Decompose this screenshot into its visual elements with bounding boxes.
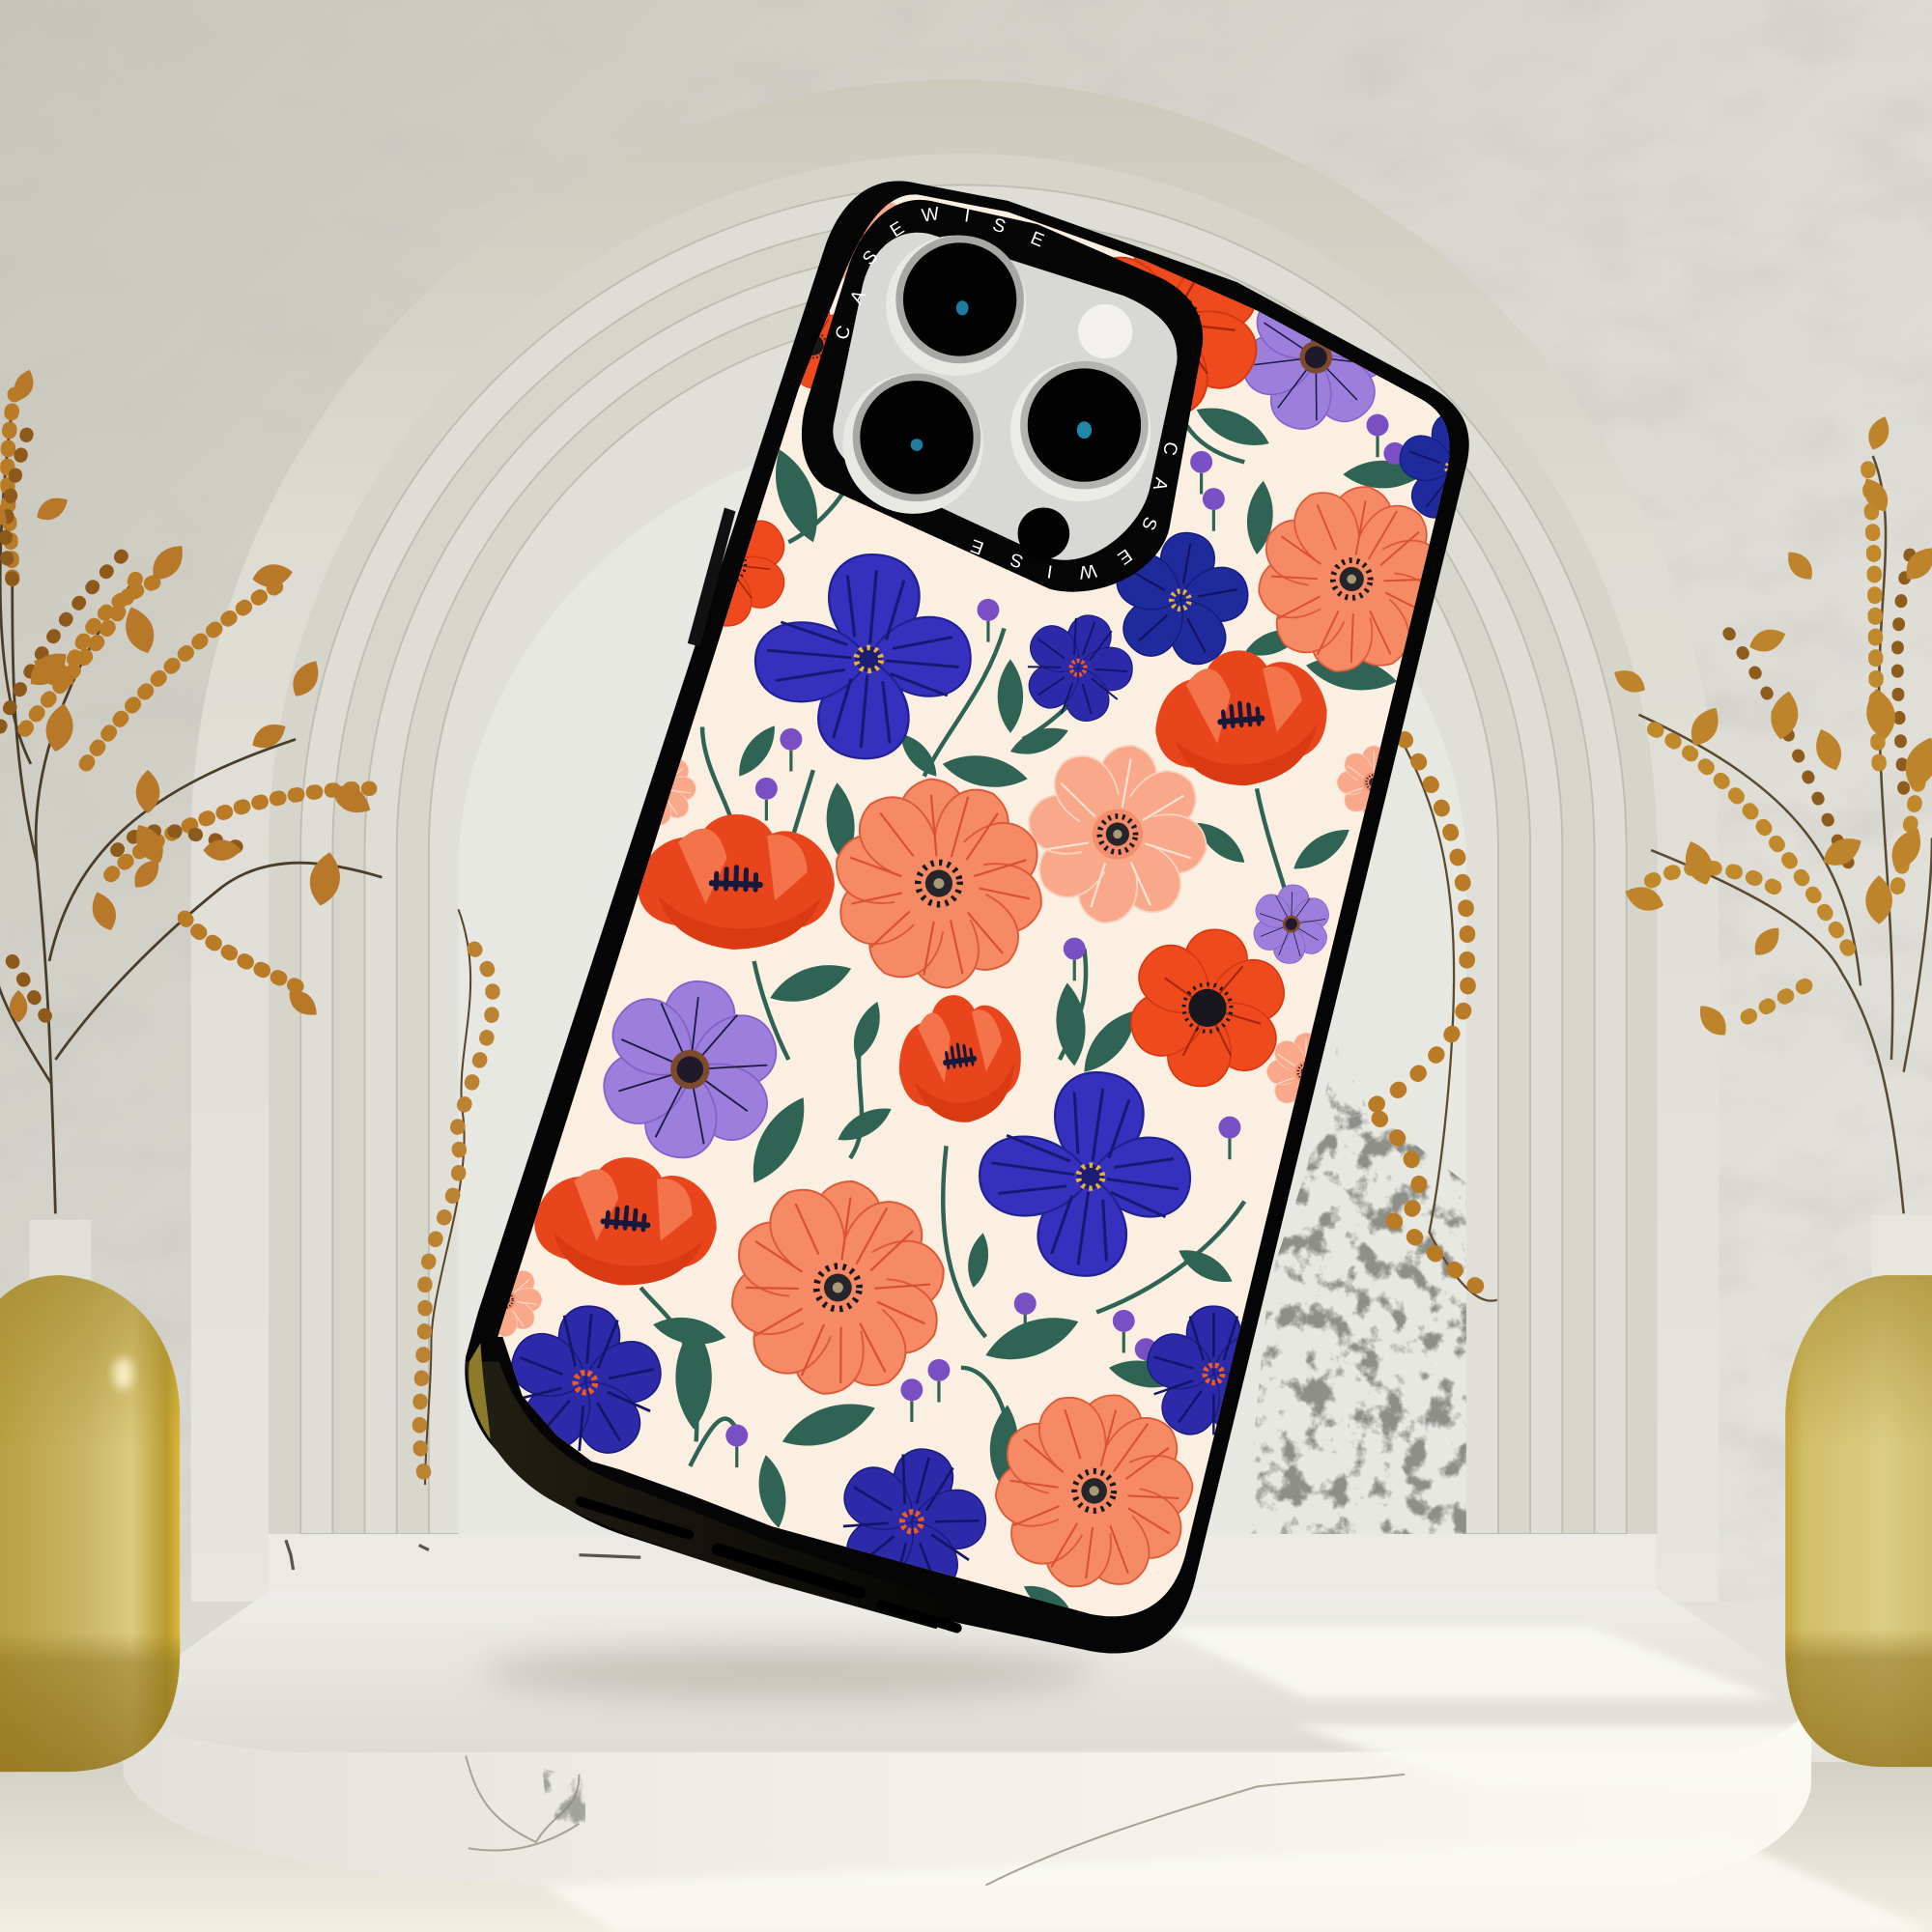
plinth front face <box>124 1694 1811 1886</box>
brand text upper: I <box>963 206 971 227</box>
lidar <box>1018 508 1069 559</box>
brand text upper: W <box>921 204 941 226</box>
brand text upper: E <box>1028 228 1047 251</box>
outer arch <box>191 80 1719 1602</box>
brand text lower: E <box>1114 545 1135 568</box>
brand text lower: E <box>968 534 986 558</box>
plinth top surface <box>123 1589 1811 1749</box>
vase highlight <box>113 1358 133 1390</box>
hanging right vine <box>1386 715 1497 1301</box>
marble veins <box>466 1756 1405 1886</box>
flash <box>1078 304 1132 358</box>
brand text upper: S <box>859 246 882 270</box>
brand text lower: W <box>1078 559 1098 582</box>
brand text upper: S <box>990 214 1008 238</box>
left branches <box>0 367 493 1485</box>
phone case <box>456 173 1514 1654</box>
right gold vase <box>1785 1215 1932 1767</box>
glossy bottom edge <box>466 1361 949 1629</box>
brand text upper: E <box>887 218 908 242</box>
bumper ring <box>802 200 1203 592</box>
vase neck <box>1872 1215 1932 1276</box>
stems and leaves <box>640 419 1292 1479</box>
gold leaves left <box>0 367 376 1023</box>
lower wall strip <box>269 1534 1656 1596</box>
vase body <box>1785 1275 1932 1767</box>
gold leaves right <box>1609 413 1932 1041</box>
arch niche <box>191 80 1719 1602</box>
stepped arch rings <box>269 154 1658 1534</box>
small wall cracks <box>286 1540 640 1570</box>
right lens <box>1010 361 1151 501</box>
floral pattern screen <box>497 194 1450 1617</box>
brand text upper <box>832 204 1047 342</box>
flowers <box>753 554 972 759</box>
brand text lower: I <box>1046 560 1054 582</box>
lower-edge slots <box>574 1495 963 1634</box>
brand text lower <box>968 440 1181 582</box>
small purple buds <box>977 599 999 642</box>
hanging left vine <box>425 909 470 1485</box>
camera plate <box>833 233 1178 560</box>
left gold vase <box>0 1220 180 1772</box>
cream ground <box>497 194 1450 1617</box>
phone shadow on plinth <box>480 1649 1096 1698</box>
side buttons <box>688 508 735 647</box>
brand text lower: A <box>1149 475 1171 493</box>
brand text upper: A <box>846 287 870 307</box>
brand text lower: C <box>1158 440 1181 457</box>
marble vein patch <box>1244 1047 1466 1534</box>
brand text upper: C <box>832 324 855 342</box>
case body <box>465 181 1469 1654</box>
plinth <box>123 1589 1932 1932</box>
brand text lower: S <box>1137 514 1160 533</box>
floor <box>0 1762 1932 1932</box>
gold reflection <box>469 1343 491 1439</box>
right branches <box>1368 413 1932 1301</box>
vase body <box>0 1275 180 1772</box>
vase neck <box>30 1220 91 1279</box>
left lens <box>842 373 983 514</box>
camera bumper <box>802 200 1203 592</box>
brand text lower: S <box>1008 549 1026 571</box>
inner opening <box>458 424 1466 1589</box>
sunlight patches <box>542 1627 1932 1932</box>
top lens <box>886 236 1026 376</box>
